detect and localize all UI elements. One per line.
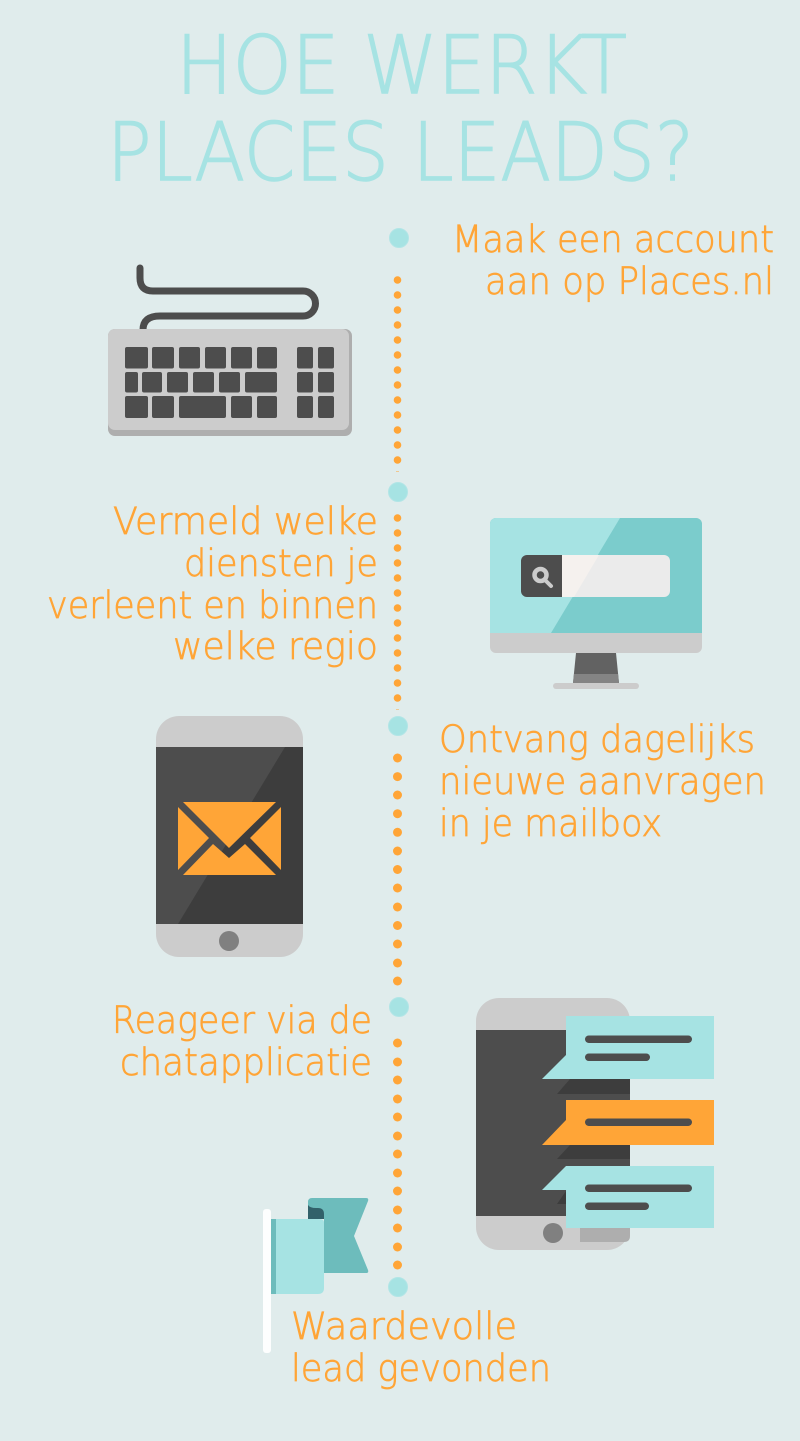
icon: phone with envelope <box>156 716 303 957</box>
step 4 text: chatapplicatie <box>120 1041 372 1084</box>
step 1 text <box>452 218 774 303</box>
chat bubble 1 <box>542 1016 714 1079</box>
step 3 text <box>439 718 766 845</box>
step 3 text: nieuwe aanvragen <box>439 760 766 803</box>
step 4 text <box>112 999 372 1084</box>
step 2 text <box>47 500 378 668</box>
title: PLACES LEADS? <box>107 106 694 199</box>
step 3 text: Ontvang dagelijks <box>439 718 755 761</box>
step 5 text: Waardevolle <box>291 1305 517 1348</box>
step 2 text: diensten je <box>184 542 378 585</box>
icon: phone with chat bubbles <box>476 998 714 1250</box>
step 1 text: aan op Places.nl <box>485 260 774 303</box>
chat bubble 2 <box>542 1100 714 1145</box>
icon: keyboard <box>108 268 352 436</box>
step 2 text: verleent en binnen <box>47 584 378 627</box>
step 2 text: Vermeld welke <box>113 500 378 543</box>
step 5 text <box>291 1305 551 1390</box>
timeline <box>388 228 408 1296</box>
chat bubble 3 <box>542 1166 714 1228</box>
step 3 text: in je mailbox <box>439 802 662 845</box>
icon: flag <box>263 1198 368 1353</box>
title: HOE WERKT <box>176 19 627 112</box>
step 5 text: lead gevonden <box>291 1347 551 1390</box>
step 4 text: Reageer via de <box>112 999 372 1042</box>
title <box>107 19 694 199</box>
step 2 text: welke regio <box>173 625 378 668</box>
step 1 text: Maak een account <box>452 218 774 261</box>
icon: monitor with search bar <box>490 518 702 689</box>
